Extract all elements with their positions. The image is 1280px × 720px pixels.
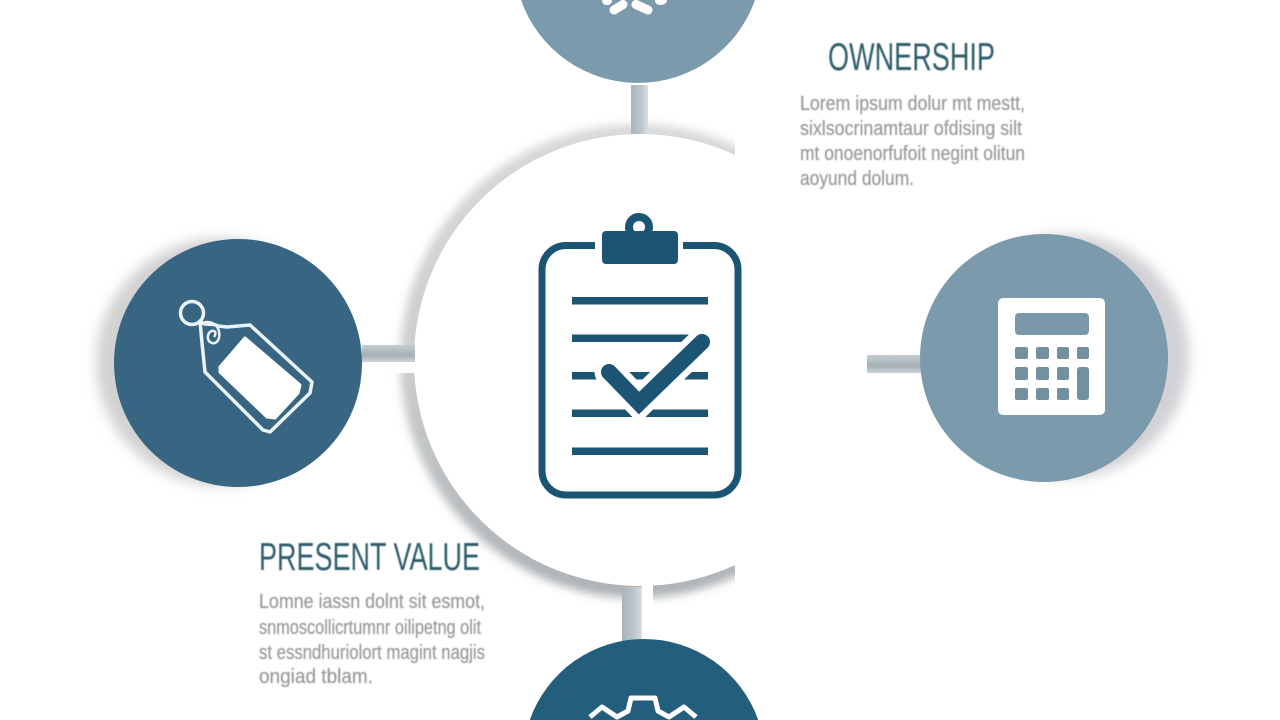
heading: ownership: OWNERSHIP bbox=[828, 36, 995, 79]
icon: price tag bbox=[180, 302, 312, 432]
text block: present value description: st essndhuriolort magint nagjis bbox=[259, 642, 485, 664]
shadow gap left bbox=[392, 362, 420, 373]
icon: clipboard with checkmark bbox=[542, 217, 738, 495]
text block: ownership description: Lorem ipsum dolur mt mestt, bbox=[800, 93, 1025, 115]
text block: present value description: snmoscollicrtumnr oilipetng olit bbox=[259, 617, 481, 639]
central circle bbox=[414, 134, 866, 586]
left node shadow bbox=[96, 238, 344, 486]
text block: present value description: ongiad tblam. bbox=[259, 666, 373, 688]
text block: present value description bbox=[259, 591, 485, 688]
text block: ownership description: mt onoenorfufoit negint olitun bbox=[800, 143, 1025, 165]
node: top bbox=[521, 0, 755, 83]
central circle shadow bbox=[396, 120, 735, 603]
heading: present value: PRESENT VALUE bbox=[259, 536, 480, 579]
connector: top bbox=[631, 85, 648, 134]
shadow gap bottom bbox=[642, 584, 653, 608]
node: bottom bbox=[530, 639, 758, 720]
icon: gear bbox=[590, 698, 696, 717]
node: left bbox=[114, 239, 362, 487]
connector: right bbox=[867, 355, 921, 373]
right node shadow bbox=[945, 234, 1189, 478]
connector: bottom bbox=[622, 587, 642, 641]
icon: handshake fragment bbox=[602, 0, 667, 10]
text block: ownership description bbox=[800, 93, 1025, 190]
text block: present value description: Lomne iassn dolnt sit esmot, bbox=[259, 591, 485, 613]
icon: calculator bbox=[998, 298, 1105, 415]
node: right bbox=[920, 234, 1168, 482]
connector: left bbox=[362, 345, 415, 362]
text block: ownership description: sixlsocrinamtaur ofdising silt bbox=[800, 118, 1022, 140]
text block: ownership description: aoyund dolum. bbox=[800, 168, 914, 190]
